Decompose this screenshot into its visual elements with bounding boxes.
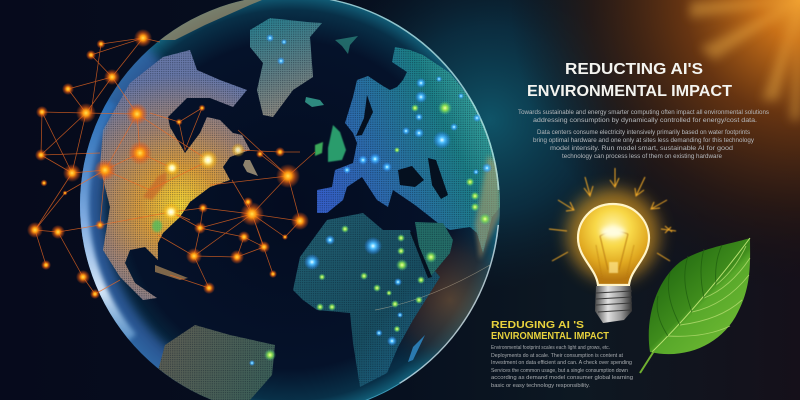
land: Iceland and arctic islands (305, 36, 358, 107)
filament (596, 231, 634, 283)
land: North America (100, 0, 262, 300)
intro text: Data centers consume electricity intensively primarily based on water footprints (537, 129, 750, 136)
main title: REDUCTING AI'S (565, 61, 703, 78)
seas: Baltic, Black and Caspian (356, 95, 448, 199)
glassy lower right of globe (402, 237, 495, 367)
screw base (595, 286, 632, 323)
intro text: technology can process less of them on existing hardware (562, 153, 723, 160)
intro text: addressing consumption by dynamically controlled for energy/cost data. (533, 117, 757, 124)
secondary yellow heading: ENVIRONMENTAL IMPACT (491, 331, 609, 342)
secondary body text: according as demand model consumer global learning (491, 375, 633, 381)
globe rim highlights (80, 0, 499, 400)
secondary yellow heading (491, 320, 609, 342)
bulb glass (578, 204, 649, 285)
secondary yellow heading: REDUGING AI 'S (491, 320, 584, 331)
city lights: green (264, 101, 491, 361)
land: Africa and Arabia (293, 213, 453, 387)
sun flare: top right corner (690, 0, 800, 120)
network nodes: white hot (162, 143, 245, 221)
network lines (35, 38, 315, 294)
land: British Isles (315, 125, 346, 162)
blue atmosphere on left limb (81, 50, 180, 384)
city lights: blue (249, 34, 492, 366)
intro text: model intensity. Run model smart, sustainable AI for good (550, 145, 734, 152)
globe (80, 0, 500, 400)
secondary body text: basic or easy technology responsibility. (491, 383, 590, 389)
land: South America (150, 325, 275, 400)
secondary body text: Services the common usage, but a single consumption down (491, 368, 628, 374)
intro text: bring optimal hardware and one only at sites less demanding for this technology (533, 137, 755, 144)
secondary body text: Environmental footprint scales each light and grows, etc. (491, 345, 610, 351)
secondary body text: Deployments do at scale. Their consumption is content at (491, 353, 623, 359)
intro text: Towards sustainable and energy smarter computing often impact all environmental solutions (518, 109, 769, 116)
globe arctic cap and India highlight (472, 154, 500, 260)
network nodes: orange (27, 29, 309, 299)
intro text (518, 109, 769, 160)
lightbulb (567, 189, 659, 323)
secondary body text: Investment on data efficient and can. A check over spending (491, 360, 632, 366)
land: Eurasia (317, 47, 500, 253)
secondary body text (491, 345, 633, 389)
leaf veins (657, 245, 750, 336)
lightbulb rays (549, 168, 676, 261)
land: Greenland (250, 18, 322, 117)
main title (527, 61, 733, 100)
leaf (640, 238, 750, 373)
main title: ENVIRONMENTAL IMPACT (527, 83, 733, 100)
